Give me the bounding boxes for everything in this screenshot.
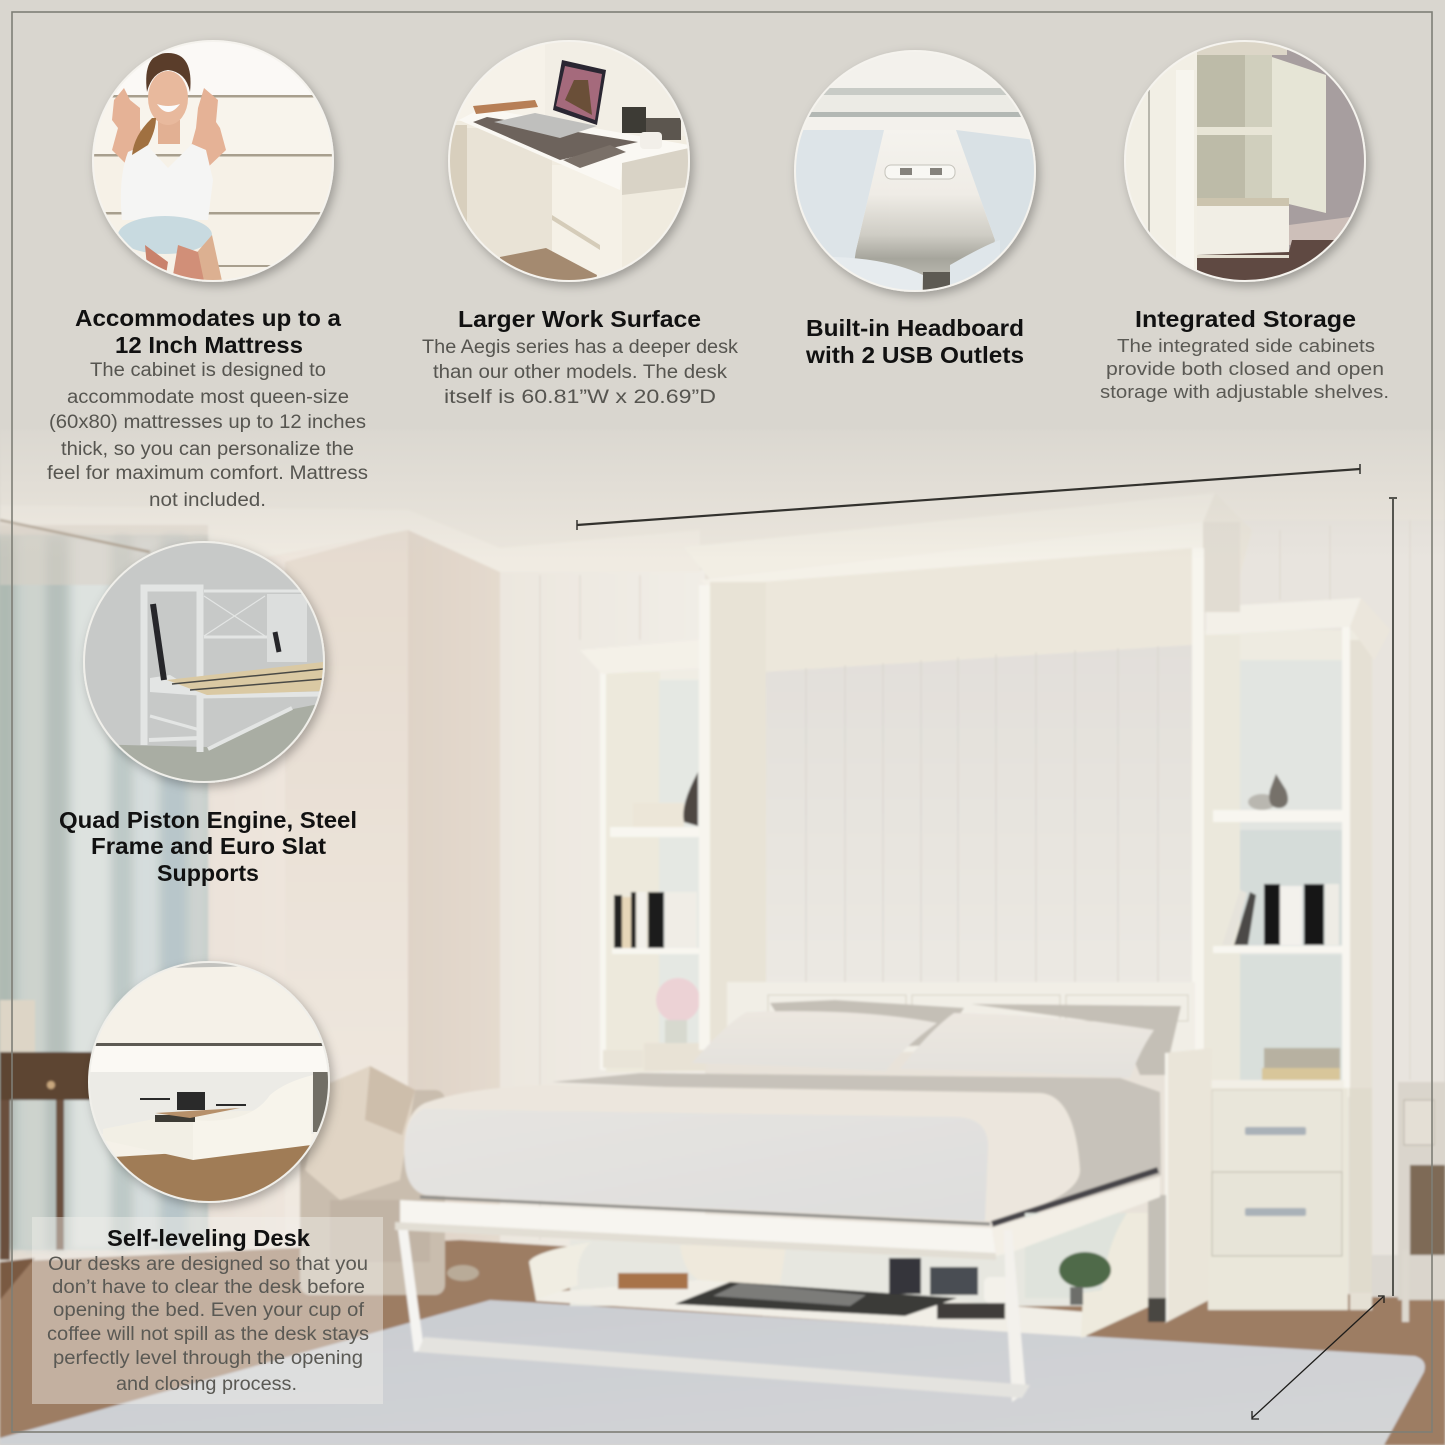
sofa and throw xyxy=(300,1066,479,1295)
drawers xyxy=(1208,1088,1372,1310)
feature text: mattress: 12 Inch Mattress xyxy=(115,332,303,358)
dimension line: width xyxy=(577,464,1360,530)
feature text: headboard: with 2 USB Outlets xyxy=(805,342,1024,368)
right bookcase xyxy=(1205,598,1390,1310)
feature text: self-leveling desk: coffee will not spill as the desk stays xyxy=(47,1324,369,1345)
feature text: mattress: not included. xyxy=(149,490,266,511)
feature text: work surface: than our other models. The desk xyxy=(433,362,728,383)
feature text: mattress: (60x80) mattresses up to 12 inches xyxy=(49,412,366,433)
feature text: self-leveling desk xyxy=(47,1225,369,1395)
room walls and ceiling xyxy=(0,430,1445,1445)
feature text: mattress: thick, so you can personalize the xyxy=(61,439,354,460)
photo circle: self-leveling desk xyxy=(89,962,333,1202)
dimension line: depth xyxy=(1252,1296,1384,1419)
crown moulding xyxy=(684,493,1215,582)
feature text: piston engine: Frame and Euro Slat xyxy=(91,833,326,859)
upper panel xyxy=(762,548,1192,672)
photo circle: USB headboard xyxy=(795,51,1035,291)
curtain xyxy=(0,520,208,1250)
grey back pillows xyxy=(770,1000,1181,1075)
feature text: work surface: itself is 60.81”W x 20.69”D xyxy=(444,387,716,408)
feature text: storage: Integrated Storage xyxy=(1135,306,1356,332)
woman xyxy=(100,53,226,281)
feature text: self-leveling desk: Self-leveling Desk xyxy=(107,1225,310,1251)
left post xyxy=(699,585,710,1050)
photo circle: work surface desk xyxy=(449,41,689,285)
bed frame and legs xyxy=(395,1177,1160,1402)
photo circle: integrated storage xyxy=(1125,41,1365,281)
feature text: self-leveling desk: opening the bed. Even your cup of xyxy=(53,1300,365,1321)
feature text: mattress: The cabinet is designed to xyxy=(90,360,326,381)
photo circle: woman on mattress xyxy=(93,41,333,281)
wall bed cabinet xyxy=(684,493,1252,1055)
feature text: mattress: accommodate most queen-size xyxy=(67,387,349,408)
feature text: mattress: feel for maximum comfort. Mattress xyxy=(47,463,368,484)
feature text: storage: storage with adjustable shelves. xyxy=(1100,382,1389,402)
feature text: work surface: Larger Work Surface xyxy=(458,306,701,332)
feature text: self-leveling desk: Our desks are designed so that you xyxy=(48,1254,368,1275)
feature text: self-leveling desk: perfectly level through the opening xyxy=(53,1348,363,1369)
feature text: work surface xyxy=(422,306,739,408)
lower panel xyxy=(765,645,1192,1000)
feature text: headboard: Built-in Headboard xyxy=(806,315,1024,341)
feature text: storage xyxy=(1100,306,1389,402)
dimension line: height xyxy=(1389,497,1397,1296)
top fade band xyxy=(0,0,1445,560)
feature text: mattress: Accommodates up to a xyxy=(75,305,341,331)
bed mattress and bedding xyxy=(404,1048,1212,1323)
feature text: storage: The integrated side cabinets xyxy=(1117,336,1375,356)
feature text: self-leveling desk: and closing process. xyxy=(116,1374,297,1395)
feature text: mattress xyxy=(47,305,368,511)
feature text: piston engine: Quad Piston Engine, Steel xyxy=(59,807,357,833)
translucent callout box: self-leveling desk xyxy=(32,1217,383,1404)
rug xyxy=(0,1300,1425,1445)
left wooden desk xyxy=(0,1000,92,1300)
left bookcase xyxy=(580,640,706,1072)
feature text: work surface: The Aegis series has a deeper desk xyxy=(422,337,739,358)
feature text: piston engine xyxy=(59,807,357,886)
right side table xyxy=(1372,1082,1445,1322)
room photograph background xyxy=(0,430,1445,1445)
feature text: headboard xyxy=(805,315,1024,368)
feature text: storage: provide both closed and open xyxy=(1106,359,1384,379)
feature text: piston engine: Supports xyxy=(157,860,259,886)
bed pillows xyxy=(692,1011,1154,1078)
feature text: self-leveling desk: don’t have to clear the desk before xyxy=(52,1277,365,1298)
photo circle: steel frame and slats xyxy=(84,542,324,782)
headboard xyxy=(727,982,1195,1052)
desk below bed xyxy=(529,1195,1166,1338)
USB outlets xyxy=(885,165,955,179)
wood floor xyxy=(0,1240,1445,1445)
